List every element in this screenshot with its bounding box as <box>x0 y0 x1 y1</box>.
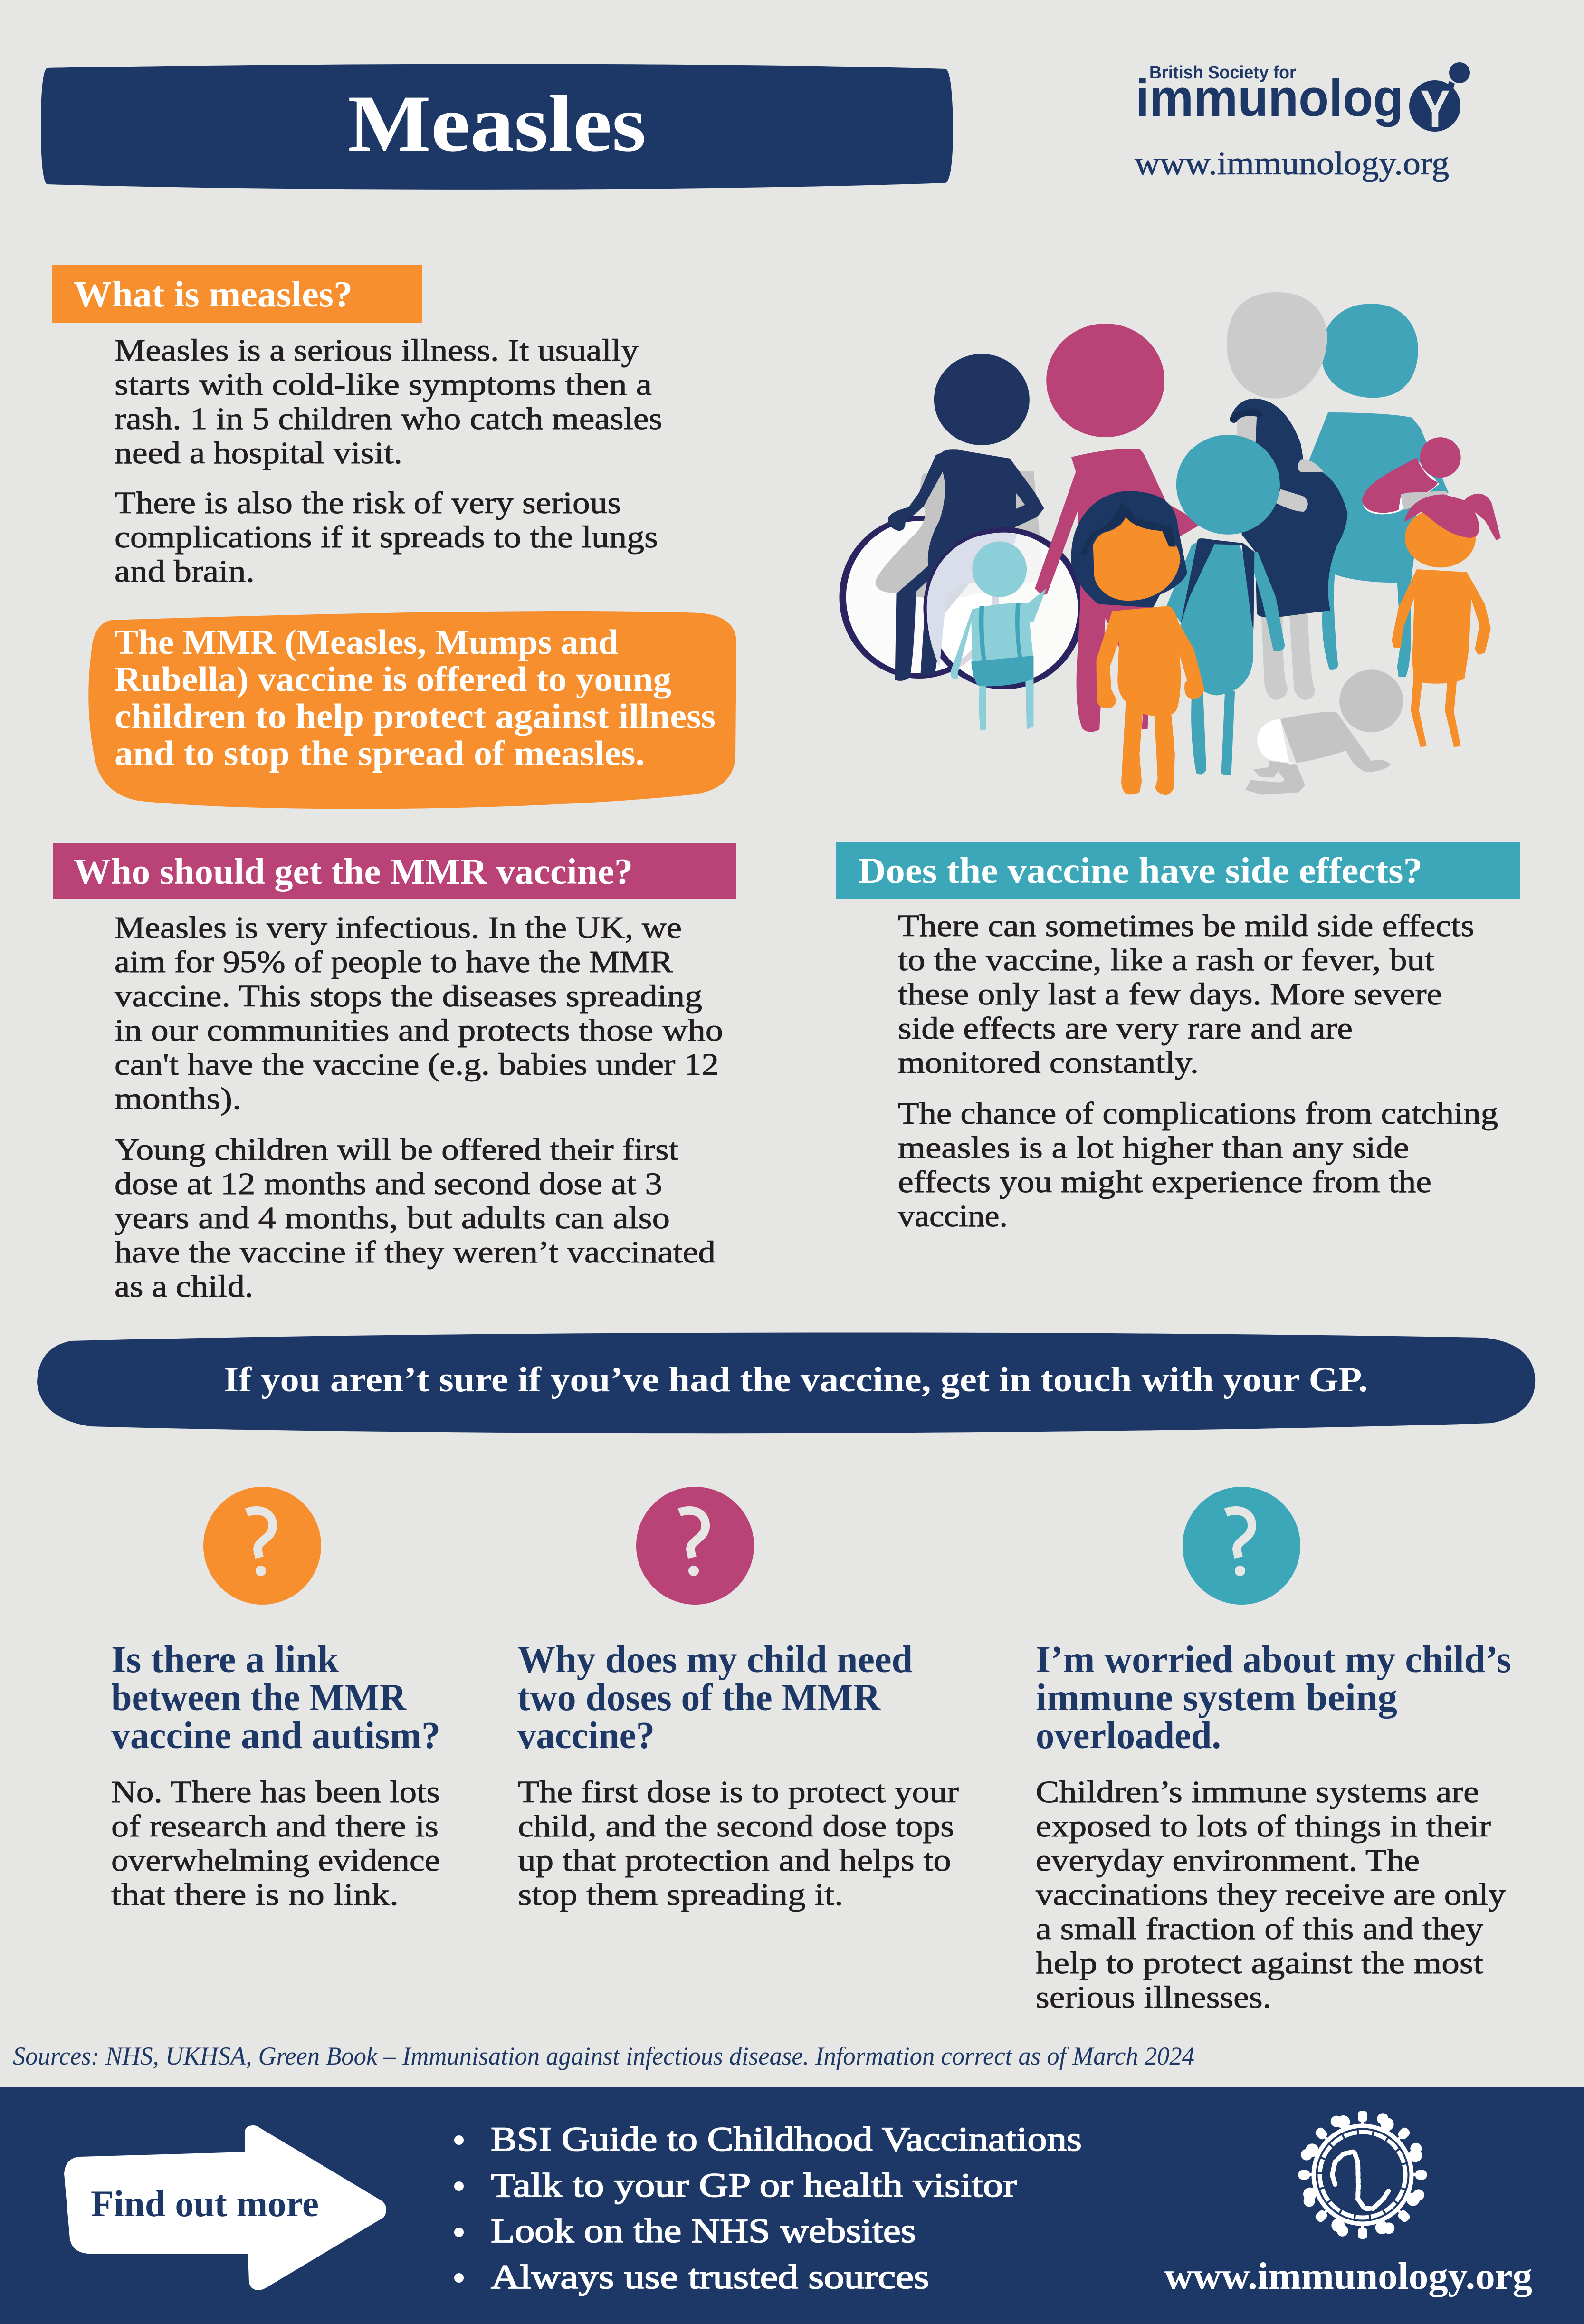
heading: question 1: Is there a link <box>111 1639 339 1681</box>
callout: MMR vaccine <box>88 611 736 809</box>
text block: side effects: effects you might experience from the <box>898 1165 1431 1199</box>
heading: side effects: Does the vaccine have side effects? <box>858 850 1422 891</box>
text block: question 3 answer: a small fraction of this and they <box>1036 1912 1483 1946</box>
text block: what is measles: need a hospital visit. <box>115 436 402 470</box>
heading: question 3: immune system being <box>1036 1677 1397 1719</box>
wheelchair user <box>843 354 1081 687</box>
orange child with dark hair <box>1071 491 1204 795</box>
panel: who should get the MMR vaccine <box>53 843 736 1304</box>
logo: British Society for Immunology: British Society for <box>1149 63 1296 83</box>
title banner: Measles <box>348 79 646 168</box>
icon: orange question mark <box>203 1487 321 1605</box>
heading: what is measles <box>52 265 422 323</box>
heading: question 1: vaccine and autism? <box>111 1715 440 1757</box>
heading: question 1 <box>111 1639 440 1757</box>
text block: question 1 answer: overwhelming evidence <box>111 1843 440 1878</box>
text block: side effects: There can sometimes be mild side effects <box>898 909 1474 943</box>
logo: British Society for Immunology: Y <box>1420 79 1450 139</box>
heading: question 3: I’m worried about my child’s <box>1036 1639 1511 1681</box>
list: further resources: Talk to your GP or health visitor <box>491 2166 1017 2204</box>
text block: side effects: to the vaccine, like a rash or fever, but <box>898 943 1434 977</box>
heading: what is measles: What is measles? <box>74 274 353 315</box>
light teal child <box>950 541 1046 730</box>
text block: question 3 answer: everyday environment. The <box>1036 1843 1420 1878</box>
text block: who should get the vaccine: as a child. <box>115 1269 253 1304</box>
text block: side effects <box>898 909 1498 1234</box>
teal adult <box>1280 304 1449 677</box>
text block: what is measles <box>115 333 662 589</box>
panel: question 1 autism <box>111 1639 440 1912</box>
heading: question 3 <box>1036 1639 1511 1757</box>
title banner <box>41 64 953 190</box>
adult in navy dress <box>1227 292 1347 700</box>
text block: side effects: monitored constantly. <box>898 1045 1199 1080</box>
text block: who should get the vaccine: in our communities and protects those who <box>115 1013 723 1048</box>
text block: question 3 answer: serious illnesses. <box>1036 1980 1271 2015</box>
heading: who should get the vaccine: Who should get the MMR vaccine? <box>74 851 633 892</box>
icon: measles virus <box>1298 2111 1427 2239</box>
heading: side effects <box>836 842 1520 899</box>
panel: question 3 immune overload <box>1036 1639 1511 2015</box>
text block: who should get the vaccine: Measles is very infectious. In the UK, we <box>115 910 682 945</box>
text block: question 2 answer: The first dose is to protect your <box>518 1775 959 1809</box>
heading: question 3: overloaded. <box>1036 1715 1221 1757</box>
text block: who should get the vaccine: months). <box>115 1081 241 1116</box>
arrow: find out more <box>64 2125 386 2290</box>
heading: question 2 <box>517 1639 913 1757</box>
sources note: Sources: NHS, UKHSA, Green Book – Immunisation against infectious disease. Information correct as of March 2024 <box>13 2042 1194 2070</box>
teal child <box>1164 435 1285 775</box>
text block: question 3 answer: vaccinations they receive are only <box>1036 1877 1506 1912</box>
list: further resources <box>454 2120 1082 2296</box>
callout: MMR vaccine: children to help protect against illness <box>115 697 716 736</box>
heading: question 2: vaccine? <box>517 1715 655 1757</box>
website link top: www.immunology.org <box>1135 145 1449 182</box>
text block: what is measles: rash. 1 in 5 children who catch measles <box>115 402 662 436</box>
text block: who should get the vaccine: have the vaccine if they weren’t vaccinated <box>115 1235 716 1270</box>
text block: who should get the vaccine <box>115 910 723 1304</box>
list: further resources: BSI Guide to Childhood Vaccinations <box>491 2120 1082 2158</box>
crawling baby <box>1245 669 1403 795</box>
magenta adult <box>1035 324 1199 732</box>
text block: what is measles: There is also the risk of very serious <box>115 486 621 520</box>
text block: who should get the vaccine: aim for 95% of people to have the MMR <box>115 945 673 979</box>
text block: what is measles: starts with cold-like symptoms then a <box>115 367 652 402</box>
text block: what is measles: complications if it spreads to the lungs <box>115 520 658 555</box>
logo: British Society for Immunology: immunolog <box>1136 69 1403 127</box>
text block: question 1 answer: of research and there is <box>111 1809 439 1844</box>
illustration: group of people <box>843 292 1501 795</box>
logo: British Society for Immunology <box>1136 62 1470 139</box>
text block: side effects: these only last a few days. More severe <box>898 977 1442 1012</box>
text block: question 2 answer: up that protection and helps to <box>518 1843 951 1878</box>
website link bottom: www.immunology.org <box>1164 2256 1532 2297</box>
heading: question 2: two doses of the MMR <box>517 1677 881 1719</box>
heading: who should get the vaccine <box>53 843 736 899</box>
text block: who should get the vaccine: years and 4 months, but adults can also <box>115 1201 670 1235</box>
text block: question 1 answer <box>111 1775 440 1912</box>
arrow: find out more: Find out more <box>91 2183 319 2224</box>
text block: who should get the vaccine: Young children will be offered their first <box>115 1132 678 1167</box>
list: further resources: Look on the NHS websites <box>491 2212 916 2250</box>
text block: question 3 answer: help to protect against the most <box>1036 1946 1483 1980</box>
text block: who should get the vaccine: vaccine. This stops the diseases spreading <box>115 979 702 1014</box>
text block: question 3 answer: exposed to lots of things in their <box>1036 1809 1491 1844</box>
heading: question 2: Why does my child need <box>517 1639 913 1681</box>
banner: contact your GP: If you aren’t sure if you’ve had the vaccine, get in touch with your GP. <box>224 1360 1368 1399</box>
callout: MMR vaccine: and to stop the spread of measles. <box>115 734 645 773</box>
footer panel <box>0 2087 1584 2324</box>
panel: side effects <box>836 842 1520 1234</box>
text block: question 3 answer <box>1036 1775 1506 2015</box>
text block: side effects: side effects are very rare and are <box>898 1011 1353 1046</box>
callout: MMR vaccine: The MMR (Measles, Mumps and <box>115 623 618 662</box>
text block: who should get the vaccine: dose at 12 months and second dose at 3 <box>115 1167 662 1201</box>
text block: question 3 answer: Children’s immune systems are <box>1036 1775 1479 1809</box>
panel: what is measles <box>52 265 662 589</box>
panel: question 2 two doses <box>517 1639 959 1912</box>
icon: magenta question mark <box>636 1487 754 1605</box>
banner: contact your GP <box>37 1332 1535 1433</box>
heading: question 1: between the MMR <box>111 1677 407 1719</box>
text block: side effects: measles is a lot higher than any side <box>898 1130 1409 1165</box>
text block: what is measles: Measles is a serious illness. It usually <box>115 333 639 368</box>
text block: question 1 answer: that there is no link. <box>111 1877 399 1912</box>
text block: question 1 answer: No. There has been lots <box>111 1775 440 1809</box>
text block: what is measles: and brain. <box>115 554 255 589</box>
icon: teal question mark <box>1183 1487 1300 1605</box>
text block: side effects: vaccine. <box>898 1199 1008 1234</box>
text block: question 2 answer: stop them spreading it. <box>518 1877 843 1912</box>
text block: question 2 answer: child, and the second dose tops <box>518 1809 954 1844</box>
callout: MMR vaccine: Rubella) vaccine is offered to young <box>115 660 671 699</box>
text block: side effects: The chance of complications from catching <box>898 1096 1498 1131</box>
list: further resources: Always use trusted sources <box>491 2258 929 2296</box>
text block: question 2 answer <box>518 1775 959 1912</box>
text block: who should get the vaccine: can't have the vaccine (e.g. babies under 12 <box>115 1047 719 1082</box>
orange child with magenta hair, magenta baby <box>1362 437 1501 747</box>
